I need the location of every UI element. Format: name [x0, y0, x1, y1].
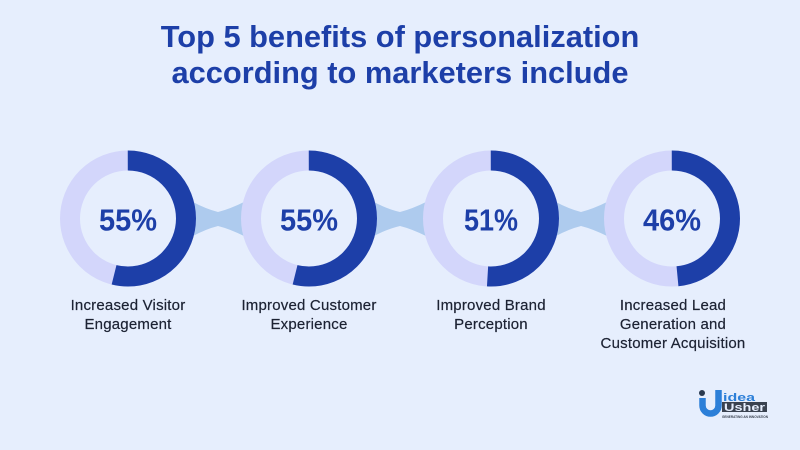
label 4: Customer Acquisition	[601, 335, 745, 352]
label 2: Experience	[270, 316, 348, 333]
logo: Idea Usher: GENERATING AN INNOVATION	[722, 415, 768, 419]
label 1: Engagement	[84, 316, 172, 333]
label 3: Improved Brand	[436, 297, 546, 314]
label 3: Perception	[454, 316, 528, 333]
donut 3: 51%: 51%	[464, 202, 518, 238]
donut 3: 51%	[433, 160, 549, 276]
donut 2: 55%: 55%	[280, 202, 338, 238]
label 4	[601, 297, 745, 352]
connector 1	[192, 202, 245, 236]
label 3	[436, 297, 546, 333]
donut 1: 55%: 55%	[99, 202, 157, 238]
connector 2	[373, 202, 427, 236]
label 1	[71, 297, 186, 333]
label 1: Increased Visitor	[71, 297, 185, 314]
connector 3	[555, 202, 608, 236]
logo: Idea Usher	[699, 390, 768, 419]
title: Top 5 benefits of personalization	[161, 19, 639, 54]
label 2	[241, 297, 377, 333]
donut 2: 55%	[251, 160, 367, 276]
title	[161, 19, 639, 90]
logo: Idea Usher: Usher	[724, 402, 766, 414]
label 4: Increased Lead	[620, 297, 726, 314]
label 2: Improved Customer	[241, 297, 377, 314]
donut 4: 46%	[614, 160, 730, 276]
title: according to marketers include	[172, 55, 628, 90]
donut 4: 46%: 46%	[643, 202, 701, 238]
donut 1: 55%	[70, 160, 186, 276]
label 4: Generation and	[620, 316, 726, 333]
logo: Idea Usher: idea	[723, 392, 756, 404]
